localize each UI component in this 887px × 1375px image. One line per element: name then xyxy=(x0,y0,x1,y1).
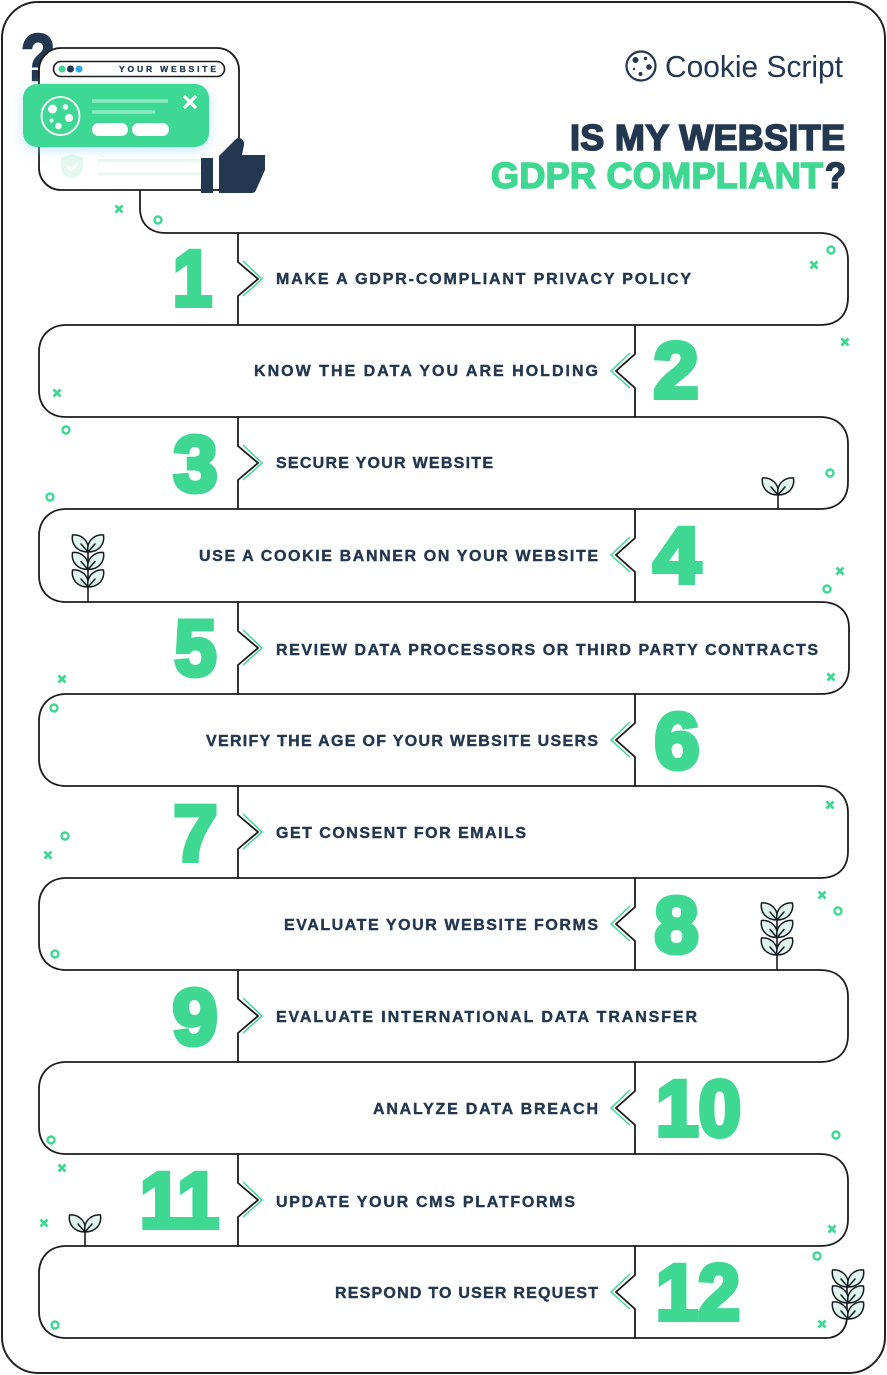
step 2: KNOW THE DATA YOU ARE HOLDING xyxy=(254,363,598,380)
step 10: ANALYZE DATA BREACH xyxy=(373,1101,598,1118)
step 5: REVIEW DATA PROCESSORS OR THIRD PARTY CONTRACTS xyxy=(276,642,818,659)
step 7: GET CONSENT FOR EMAILS xyxy=(276,825,526,842)
step 9 xyxy=(172,970,697,1062)
step 10: 10 xyxy=(656,1064,741,1152)
illustration: browser window with cookie banner xyxy=(21,20,265,193)
title xyxy=(491,117,846,196)
step 7 xyxy=(174,786,526,878)
decorative green crosses and circles xyxy=(40,206,848,1328)
step 8: 8 xyxy=(654,880,698,969)
plant: sprout row 11 xyxy=(69,1215,101,1246)
step 6 xyxy=(206,694,700,786)
step 10 xyxy=(373,1062,741,1154)
step 5: 5 xyxy=(174,603,216,692)
step 12: RESPOND TO USER REQUEST xyxy=(335,1285,598,1302)
step 12: 12 xyxy=(656,1248,740,1336)
address bar: YOUR WEBSITE xyxy=(119,64,216,74)
title: GDPR COMPLIANT xyxy=(491,155,823,196)
step 5 xyxy=(174,602,818,694)
plant: triple leaf row 4 xyxy=(72,535,104,602)
logo: Cookie Script: Cookie Script xyxy=(665,49,843,84)
plant: triple leaf row 8 xyxy=(761,903,793,970)
step 2: 2 xyxy=(654,326,698,414)
serpentine steps path xyxy=(39,190,849,1338)
step 3: SECURE YOUR WEBSITE xyxy=(276,455,493,472)
step 1: 1 xyxy=(173,234,212,322)
icon: question mark: ? xyxy=(21,20,55,94)
title: ? xyxy=(825,155,846,196)
address bar xyxy=(54,62,224,76)
step 3: 3 xyxy=(174,419,218,508)
step 3 xyxy=(174,417,493,509)
step 2 xyxy=(254,325,698,417)
step 6: 6 xyxy=(654,696,700,785)
step 1 xyxy=(173,233,691,325)
cookie banner xyxy=(23,84,209,147)
plant: sprout row 3 xyxy=(762,478,794,509)
step 4 xyxy=(199,509,701,602)
step 6: VERIFY THE AGE OF YOUR WEBSITE USERS xyxy=(206,733,598,750)
step 8 xyxy=(284,878,698,970)
icon: thumbs up xyxy=(201,138,265,193)
step 11: 11 xyxy=(140,1156,219,1244)
step 4: 4 xyxy=(654,510,701,600)
step 12 xyxy=(335,1246,740,1338)
step 11: UPDATE YOUR CMS PLATFORMS xyxy=(276,1194,575,1211)
step 9: EVALUATE INTERNATIONAL DATA TRANSFER xyxy=(276,1009,697,1026)
faded shield content xyxy=(61,154,202,179)
browser window xyxy=(39,48,239,190)
title: IS MY WEBSITE xyxy=(570,117,845,158)
plant: triple leaf row 12 xyxy=(832,1270,864,1320)
step 8: EVALUATE YOUR WEBSITE FORMS xyxy=(284,917,598,934)
step 4: USE A COOKIE BANNER ON YOUR WEBSITE xyxy=(199,548,598,565)
step 11 xyxy=(140,1154,575,1246)
step 7: 7 xyxy=(174,788,218,878)
step 1: MAKE A GDPR-COMPLIANT PRIVACY POLICY xyxy=(276,271,691,288)
step 9: 9 xyxy=(172,972,218,1061)
